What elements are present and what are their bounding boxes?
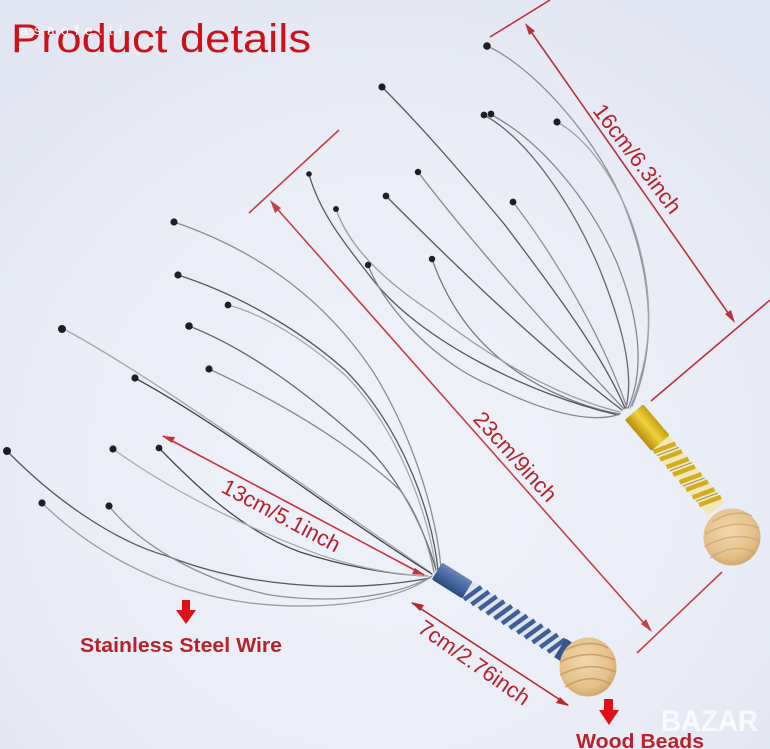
dimension: 7cm: 7cm/2.76inch bbox=[414, 615, 535, 710]
dimension: 23cm bbox=[249, 130, 722, 653]
down arrow: stainless steel wire bbox=[176, 600, 196, 624]
title: Product details bbox=[11, 17, 311, 61]
left massager wire tips bbox=[3, 218, 231, 510]
left massager wires bbox=[7, 222, 441, 606]
dimension: 13cm bbox=[162, 436, 425, 575]
dimension: 23cm: 23cm/9inch bbox=[468, 406, 562, 507]
blue handle bbox=[431, 562, 572, 661]
down arrow: wood beads bbox=[599, 699, 619, 725]
gold handle bbox=[625, 404, 726, 516]
wood bead gold handle bbox=[704, 508, 760, 566]
dimension: 7cm bbox=[411, 602, 569, 710]
dimension: 16cm: 16cm/6.3inch bbox=[588, 99, 687, 218]
dimension: 13cm: 13cm/5.1inch bbox=[218, 474, 345, 557]
right massager wires bbox=[309, 46, 649, 418]
watermark: bazar: BAZAR bbox=[661, 705, 758, 738]
dimension: 16cm bbox=[490, 0, 770, 401]
watermark top: asaofe.ti bbox=[20, 22, 122, 38]
right massager wire tips bbox=[306, 42, 561, 268]
label: stainless steel wire: Stainless Steel Wire bbox=[80, 635, 282, 657]
wood bead blue handle bbox=[560, 638, 616, 696]
